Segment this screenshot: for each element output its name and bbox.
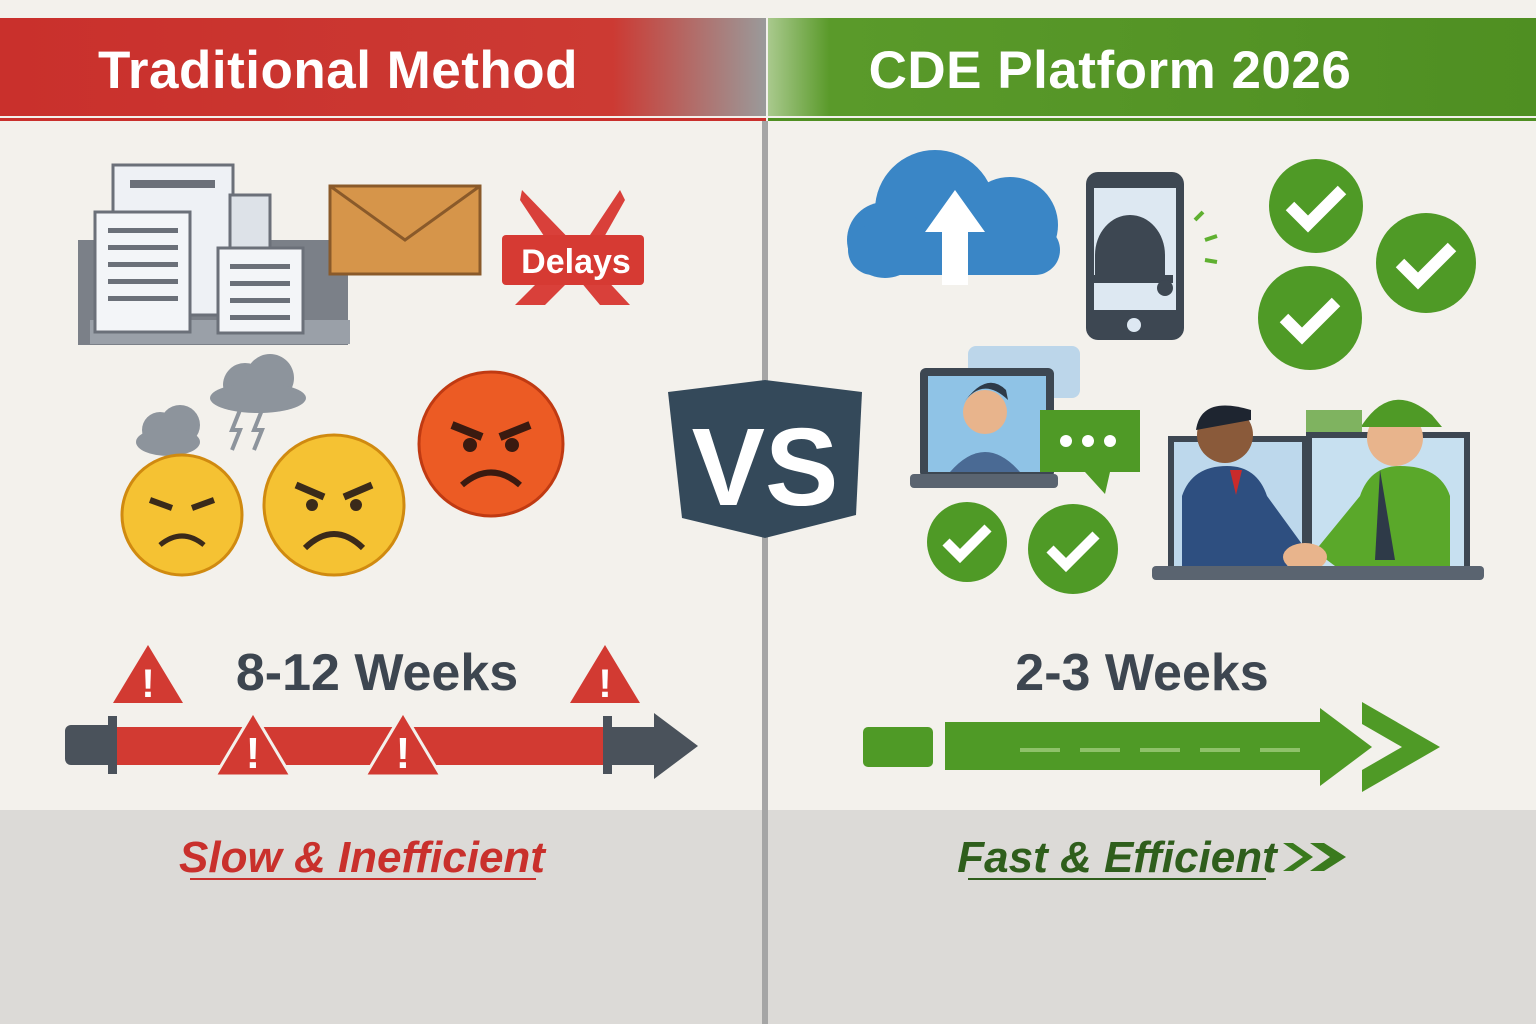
icon: storm clouds [136, 354, 306, 456]
vs badge: VS [692, 406, 838, 529]
caption: slow: Slow & Inefficient [179, 833, 547, 882]
icon: paper stacks [78, 165, 350, 345]
header: traditional method: Traditional Method [98, 41, 578, 100]
icon: check marks top [1258, 159, 1476, 370]
icon: video call laptop with chat [910, 346, 1140, 494]
timeline: traditional: ! [598, 662, 612, 706]
timeline: CDE [863, 644, 1440, 792]
icon: cloud upload [847, 150, 1060, 285]
vs badge [668, 380, 862, 538]
icon: angry emojis [122, 372, 563, 575]
icon: envelope [330, 186, 480, 274]
icon: check marks bottom [927, 502, 1118, 594]
icon: phone bell [1086, 172, 1217, 340]
icon: delays tag [502, 190, 644, 305]
timeline: traditional: 8-12 Weeks [236, 644, 518, 702]
header: CDE platform: CDE Platform 2026 [869, 41, 1351, 100]
header: CDE platform [768, 18, 1536, 121]
header: traditional method [0, 18, 766, 121]
timeline: traditional [65, 644, 698, 779]
icon: handshake on screens [1152, 400, 1484, 580]
timeline: traditional: ! [141, 662, 155, 706]
icon: delays tag: Delays [521, 243, 631, 281]
bottom band [0, 810, 1536, 1024]
caption: fast: Fast & Efficient [957, 833, 1279, 882]
timeline: traditional: ! [246, 729, 260, 778]
timeline: CDE: 2-3 Weeks [1015, 644, 1269, 702]
center divider [762, 121, 768, 1024]
timeline: traditional: ! [396, 729, 410, 778]
